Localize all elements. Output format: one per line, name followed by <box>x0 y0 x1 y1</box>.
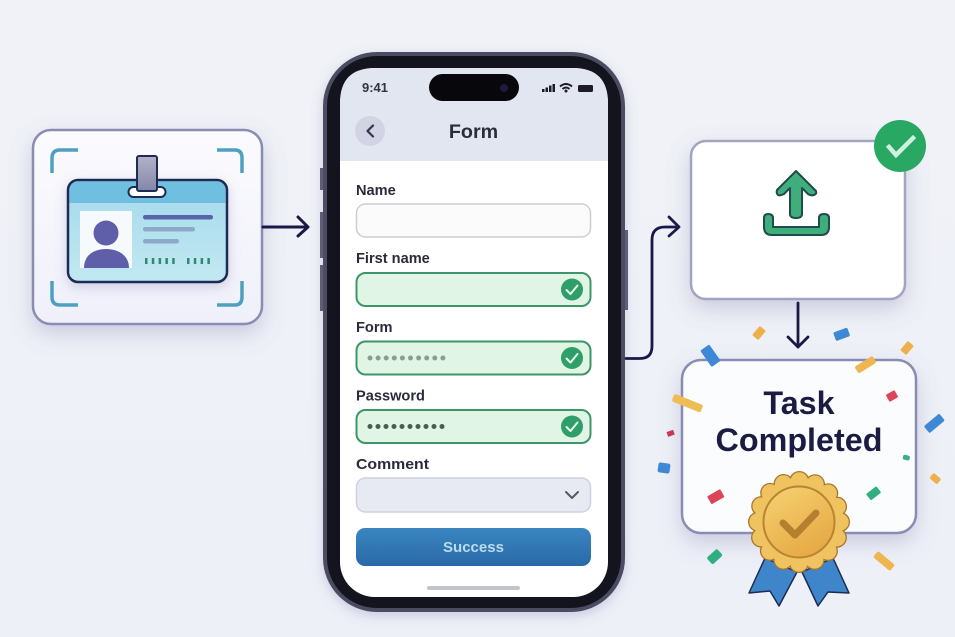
phone <box>320 52 628 612</box>
arrow: ID card to phone <box>263 217 308 236</box>
field: password <box>356 388 590 443</box>
button: success: Success <box>443 539 504 556</box>
dynamic island <box>429 74 519 101</box>
arrow: phone to upload <box>626 217 679 358</box>
field: first name: First name <box>356 251 430 267</box>
icon: success check badge <box>874 120 926 172</box>
field: form: Form <box>356 320 393 336</box>
field: name <box>356 183 590 237</box>
app header <box>340 68 608 161</box>
field: first name <box>356 251 590 306</box>
screen title: Form <box>449 121 498 143</box>
phone body <box>323 52 625 612</box>
heading: task completed: Task <box>763 385 835 421</box>
icon: upload arrow <box>764 171 829 235</box>
medal centre <box>764 486 834 558</box>
back button <box>355 116 385 146</box>
home indicator <box>427 586 520 590</box>
status icons <box>542 84 593 92</box>
medal scalloped edge <box>758 481 840 563</box>
field: comment <box>356 457 590 512</box>
icon: ID badge <box>68 156 227 282</box>
field: name: Name <box>356 183 396 199</box>
ribbons <box>749 558 849 606</box>
icon: gold medal with ribbons <box>749 481 849 606</box>
phone side buttons <box>320 168 628 311</box>
field: password: Password <box>356 388 425 404</box>
panel: task completed: Completed <box>716 422 882 458</box>
button: success <box>356 528 591 566</box>
arrow: upload to task completed <box>788 303 808 347</box>
confetti <box>657 326 945 571</box>
status time: 9:41 <box>362 80 388 95</box>
field: comment: Comment <box>356 457 429 473</box>
scan corner brackets <box>52 150 242 305</box>
medal check <box>783 513 816 535</box>
panel: task completed <box>682 360 916 533</box>
field: form <box>356 320 590 374</box>
panel: upload <box>691 120 926 299</box>
panel: ID card scan <box>33 130 262 324</box>
